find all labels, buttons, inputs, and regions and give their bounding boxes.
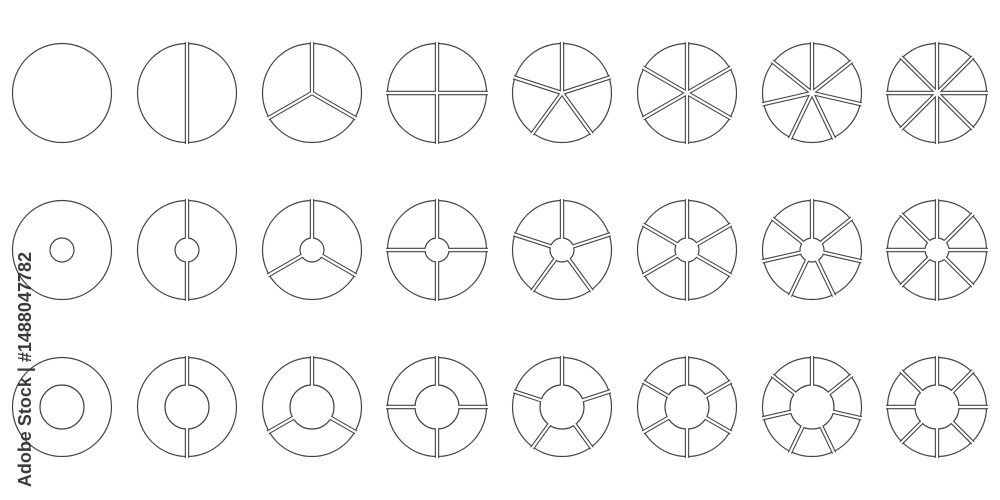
donut 1 (12, 358, 112, 456)
ring 6 (638, 198, 736, 302)
row 2: pies with small hole (12, 198, 989, 302)
donut 2 (138, 355, 236, 459)
ring 7 (761, 198, 863, 300)
ring 4 (385, 198, 489, 302)
donut 6 (638, 355, 736, 459)
ring 2 (138, 198, 236, 302)
donut 4 (385, 355, 489, 459)
pie 1 (12, 44, 112, 142)
pie 3 (262, 41, 362, 142)
donut 7 (761, 355, 863, 456)
donut 3 (262, 355, 362, 456)
pie 5 (512, 41, 612, 142)
ring 5 (512, 198, 612, 300)
ring 3 (262, 198, 362, 300)
ring 8 (885, 198, 989, 302)
row 1: pie charts 1-8 segments (12, 41, 989, 145)
pie 7 (761, 41, 863, 142)
watermark text: Adobe Stock | #1488047782 (15, 252, 35, 487)
row 3: donuts with large hole (12, 355, 989, 459)
pie 4 (385, 41, 489, 145)
donut 5 (512, 355, 612, 456)
donut 8 (885, 355, 989, 459)
pie 2 (138, 41, 236, 145)
ring 1 (12, 200, 112, 300)
pie 6 (638, 41, 736, 145)
pie 8 (885, 41, 989, 145)
